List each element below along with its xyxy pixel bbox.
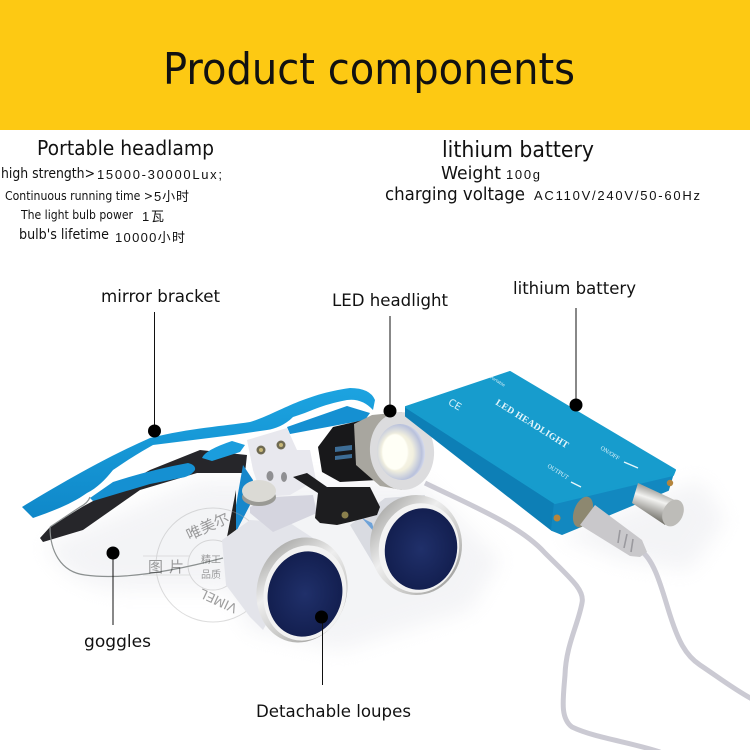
title: Product components [163,44,575,95]
callout: lithium battery: lithium battery [513,279,636,299]
watermark stamp: VIMEL [197,585,240,615]
text block: lithium battery specs: charging voltage [385,184,525,205]
text block: portable headlamp specs: 5小时 [154,189,189,204]
soft shadows [45,480,725,650]
OUTPUT label: OUTPUT [546,464,569,481]
text block: portable headlamp specs: Continuous running time > [5,189,153,203]
watermark stamp: 精工 [201,553,221,566]
callout: goggles: goggles [84,632,151,652]
lower blue branch [90,463,195,501]
mounting bracket and slide [222,428,425,630]
side face [406,407,555,530]
text block: lithium battery specs [385,138,700,205]
text block: lithium battery specs: AC110V/240V/50-60Hz [534,188,700,203]
right loupe [370,495,462,595]
text block: lithium battery specs: 100g [506,167,540,182]
lithium battery pack [406,372,688,557]
callout: LED headlight [332,291,448,418]
CE mark: CE [446,397,463,413]
callout: goggles [84,546,151,652]
callout: detachable loupes [256,610,411,722]
black barrel [318,418,378,482]
callout: LED headlight: LED headlight [332,291,448,311]
text block: portable headlamp specs: 15000-30000Lux; [97,167,222,182]
blue clip [202,441,245,461]
text block: portable headlamp specs: The light bulb power [20,208,133,222]
callout: mirror bracket [101,287,220,438]
text block: portable headlamp specs: bulb's lifetime [19,227,109,243]
second blue band [287,406,370,434]
top face [406,372,675,503]
callout: detachable loupes: Detachable loupes [256,702,411,722]
callout: mirror bracket: mirror bracket [101,287,220,307]
text block: portable headlamp specs: Portable headlamp [37,136,214,160]
text block: portable headlamp specs: high strength> [1,166,95,182]
ON/OFF label: ON/OFF [599,446,621,462]
text block: portable headlamp specs: 1瓦 [142,209,164,224]
text block: portable headlamp specs [1,136,222,245]
thumb knob [242,488,276,506]
model label: LED HEADLIGHT [493,398,571,451]
goggles [22,388,375,576]
watermark stamp: 唯美尔 [184,510,232,544]
end face [552,473,673,534]
watermark stamp: 品质 [201,569,221,581]
screws [554,514,560,522]
callout: lithium battery [513,279,636,412]
right barrel [350,495,425,590]
white bracket [247,428,316,497]
detachable loupes [245,495,467,653]
clear lens [50,497,223,576]
upper blue frame [22,388,375,518]
watermark stamp [143,508,286,622]
text block: lithium battery specs: lithium battery [442,138,594,163]
title banner [0,0,750,130]
blue hinge [232,465,253,530]
left barrel [222,520,313,630]
ring [366,409,438,493]
silver head [354,412,402,490]
black temple arm [40,450,247,542]
watermark stamp: 实拍 [244,559,286,576]
cable: headlamp cord [425,483,660,750]
fine print: Portable [489,375,507,388]
switch knob [632,483,681,525]
text block: portable headlamp specs: 10000小时 [115,230,185,245]
watermark stamp: 图片 [148,559,190,576]
left loupe [245,527,359,653]
output jack and plug [569,494,597,530]
text block: lithium battery specs: Weight [441,163,501,184]
lit bulb [374,422,428,482]
cable: battery cord [640,550,750,699]
slide block [250,495,317,532]
black bracket [293,473,380,525]
LED headlight [293,409,438,525]
